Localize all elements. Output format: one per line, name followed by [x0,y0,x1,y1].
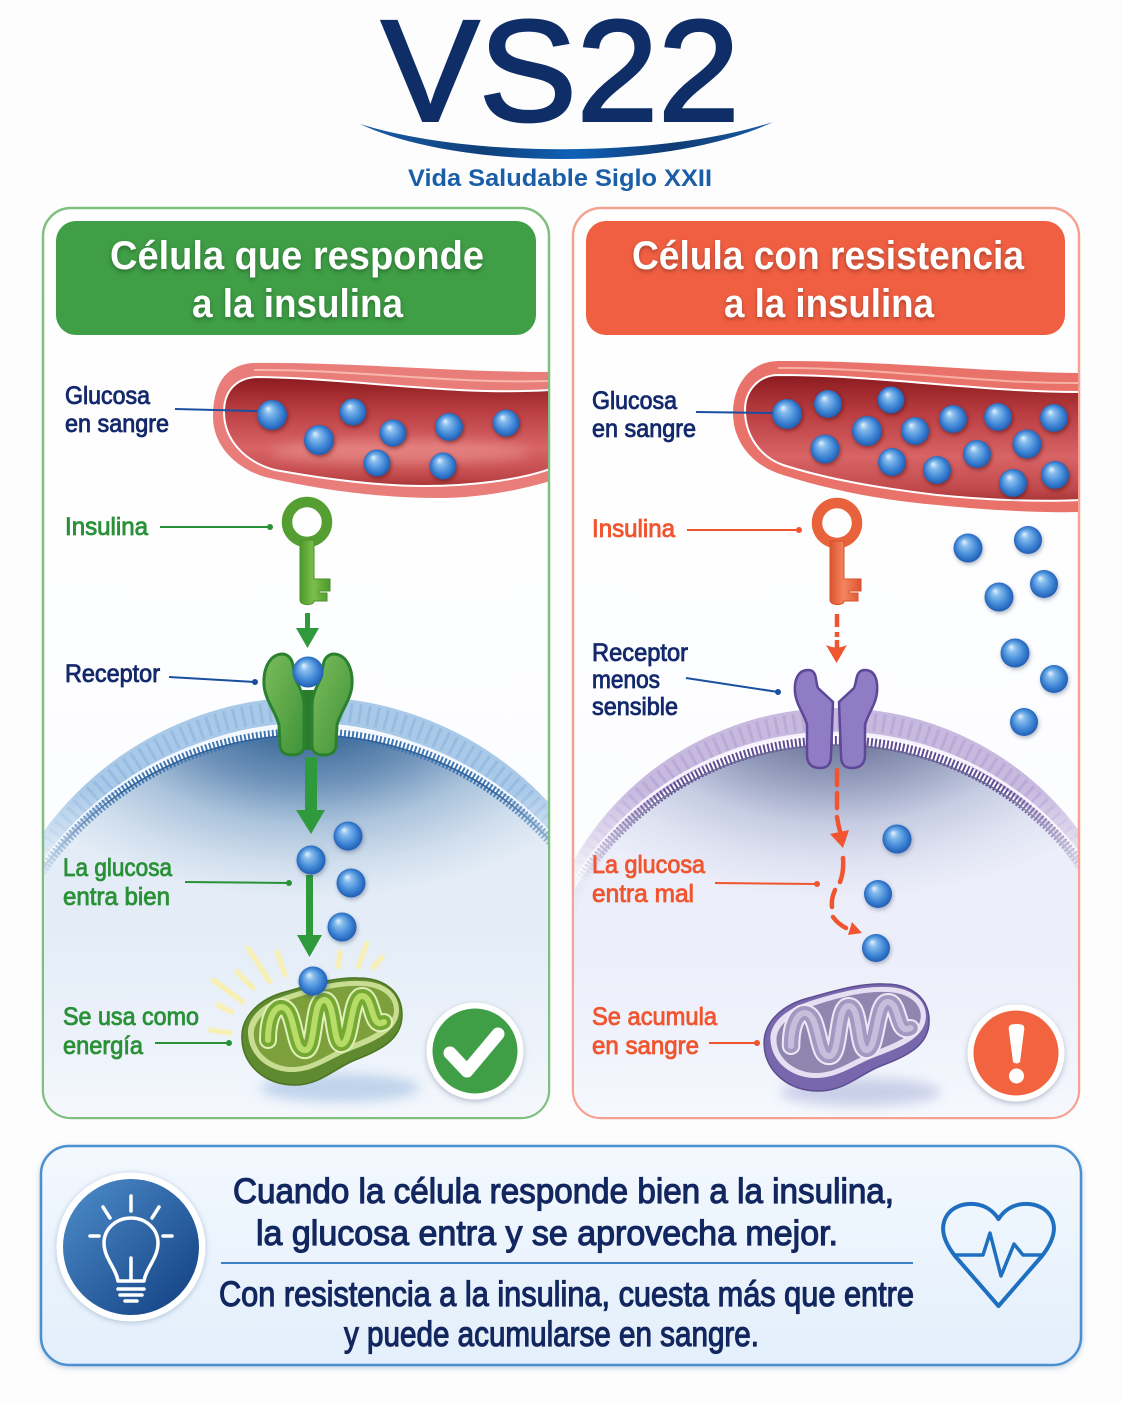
cell membrane right [574,708,1078,897]
label: la glucosa entra bien [63,854,292,911]
label: insulina [592,515,802,543]
heading: Célula con resistencia [632,234,1025,278]
summary text top [233,1172,894,1253]
label: la glucosa entra bien: La glucosa [63,854,172,882]
label: se usa como energía: Se usa como [63,1003,199,1031]
label: receptor menos sensible: menos [592,666,660,694]
label: la glucosa entra mal: entra mal [592,880,694,908]
cell interior right [574,746,1078,1117]
heading [56,221,536,335]
label: se usa como energía: energía [63,1032,143,1060]
arrow: glucose enters [296,757,325,834]
panel: célula con resistencia [572,206,1080,1120]
glucose outside the cell [954,526,1068,736]
mitochondrion purple [764,984,929,1091]
glucose spheres in vessel [772,386,1069,497]
label: se acumula en sangre: Se acumula [592,1003,717,1031]
cell interior left [44,737,548,1117]
glucose at mitochondrion [298,966,328,996]
heading: Célula que responde [110,234,484,278]
label: se acumula en sangre: en sangre [592,1032,699,1060]
label: receptor menos sensible: Receptor [592,639,688,667]
mitochondrion green [242,978,402,1085]
glucose on arrow [296,846,326,874]
label: la glucosa entra bien: entra bien [63,883,170,911]
label: insulina: Insulina [592,515,675,543]
label: se usa como energía [63,1003,232,1060]
arrow: dashed to receptor [826,614,847,663]
glucose entering cell [328,822,366,942]
label: glucosa en sangre [65,382,257,438]
receptor: green [264,654,352,755]
label: la glucosa entra mal: La glucosa [592,851,705,879]
label: insulina: Insulina [65,513,148,541]
arrow: to mitochondrion [297,875,322,957]
arrow: dashed curved [830,770,862,935]
tagline: Vida Saludable Siglo XXII [408,165,712,192]
logo swoosh [360,122,773,159]
heading: a la insulina [192,282,404,326]
label: insulina [65,513,273,541]
summary text bottom [219,1275,914,1354]
heading: a la insulina [724,282,935,326]
label: receptor menos sensible: sensible [592,693,678,721]
label: receptor menos sensible [592,639,781,721]
icon: check badge [426,1002,524,1100]
label: glucosa en sangre: Glucosa [592,387,677,415]
icon: heart with pulse [943,1204,1054,1306]
cell membrane left [44,700,548,876]
blood vessel left [213,363,550,498]
icon: green key [287,502,330,605]
summary text top: Cuando la célula responde bien a la insulina, [233,1172,894,1211]
glucose spheres in vessel [257,398,520,480]
icon: light bulb [56,1172,206,1322]
label: se acumula en sangre [592,1003,760,1060]
panel: summary [41,1146,1081,1365]
icon: red key [817,503,861,605]
label: glucosa en sangre [592,387,773,443]
receptor: purple [795,670,877,768]
heading [586,221,1065,335]
logo [360,0,773,192]
arrow: key to receptor [296,613,319,648]
label: glucosa en sangre: en sangre [592,415,696,443]
summary text bottom: y puede acumularse en sangre. [344,1315,759,1354]
energy rays [210,943,382,1033]
blood vessel right [733,361,1080,512]
label: receptor [65,660,258,688]
label: glucosa en sangre: en sangre [65,410,169,438]
summary text bottom: Con resistencia a la insulina, cuesta más que entre [219,1275,914,1314]
icon: warning badge [968,1004,1064,1102]
glucose inside the cell [862,824,912,962]
label: la glucosa entra mal [592,851,820,908]
panel: célula que responde [42,206,550,1120]
label: glucosa en sangre: Glucosa [65,382,150,410]
summary text top: la glucosa entra y se aprovecha mejor. [256,1214,838,1253]
label: receptor: Receptor [65,660,160,688]
